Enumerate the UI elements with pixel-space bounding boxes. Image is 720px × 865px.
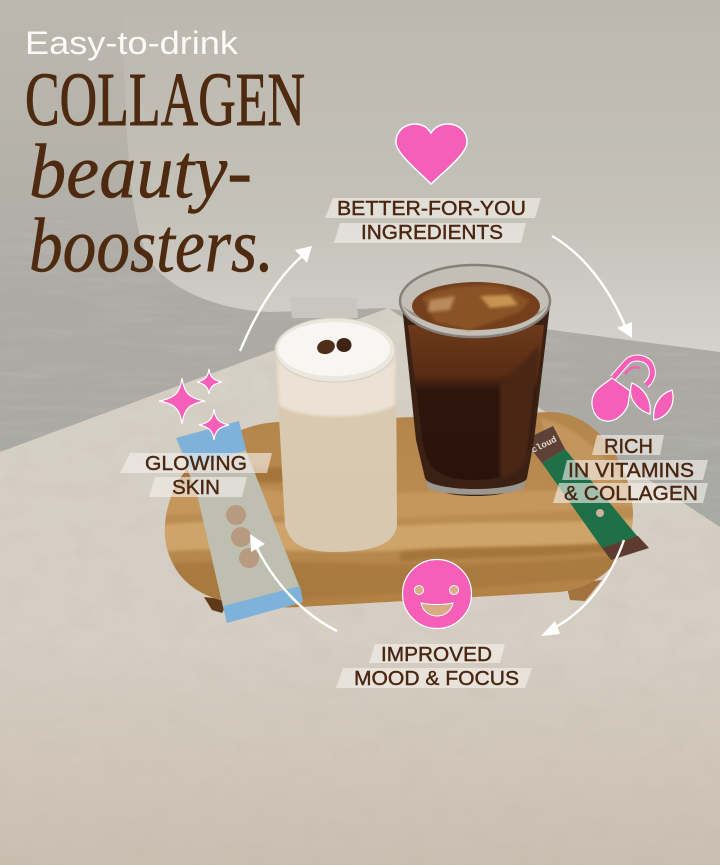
icon: sparkles xyxy=(159,369,229,440)
label: glowing skin: SKIN xyxy=(172,477,220,499)
label: glowing skin: GLOWING xyxy=(145,453,247,475)
heading block xyxy=(25,25,305,288)
label: glowing skin xyxy=(120,453,272,499)
latte glass xyxy=(275,318,397,552)
arrow: better-for-you to vitamins xyxy=(552,236,632,338)
label: improved mood and focus xyxy=(336,644,532,690)
label: improved mood and focus: IMPROVED xyxy=(381,644,492,666)
coffee beans xyxy=(315,338,352,356)
iced coffee glass xyxy=(400,265,550,496)
heading: boosters: boosters. xyxy=(29,202,274,288)
label: improved mood and focus: MOOD & FOCUS xyxy=(354,668,519,690)
label: better-for-you ingredients: BETTER-FOR-YOU xyxy=(337,198,526,220)
heading: collagen: COLLAGEN xyxy=(25,58,305,142)
label: better-for-you ingredients: INGREDIENTS xyxy=(361,222,503,244)
tray legs xyxy=(204,580,602,613)
label: rich in vitamins and collagen xyxy=(553,435,708,505)
background: stone slab xyxy=(0,308,720,865)
wooden tray xyxy=(160,405,640,615)
heading: easy-to-drink: Easy-to-drink xyxy=(25,25,239,61)
background: tub notch xyxy=(290,297,358,318)
sachet wordmark: cloud xyxy=(530,435,559,456)
arrow: glowing skin to better-for-you xyxy=(240,246,312,351)
blue sachet xyxy=(176,421,303,623)
background: carpet texture xyxy=(0,220,720,540)
label: rich in vitamins and collagen: & COLLAGEN xyxy=(564,483,698,505)
green sachet xyxy=(524,426,649,560)
label: better-for-you ingredients xyxy=(325,198,541,244)
arrow: mood to glowing skin xyxy=(250,534,337,631)
icon: capsule and leaves xyxy=(592,358,673,421)
label: rich in vitamins and collagen: IN VITAMINS xyxy=(568,460,694,482)
icon: heart xyxy=(396,124,467,184)
icon: smiley face xyxy=(402,560,472,628)
label: rich in vitamins and collagen: RICH xyxy=(604,436,653,458)
heading: beauty-: beauty- xyxy=(29,128,252,214)
background: stone texture xyxy=(0,300,720,865)
arrow: vitamins to mood xyxy=(541,540,624,636)
background: white tub xyxy=(122,0,720,352)
